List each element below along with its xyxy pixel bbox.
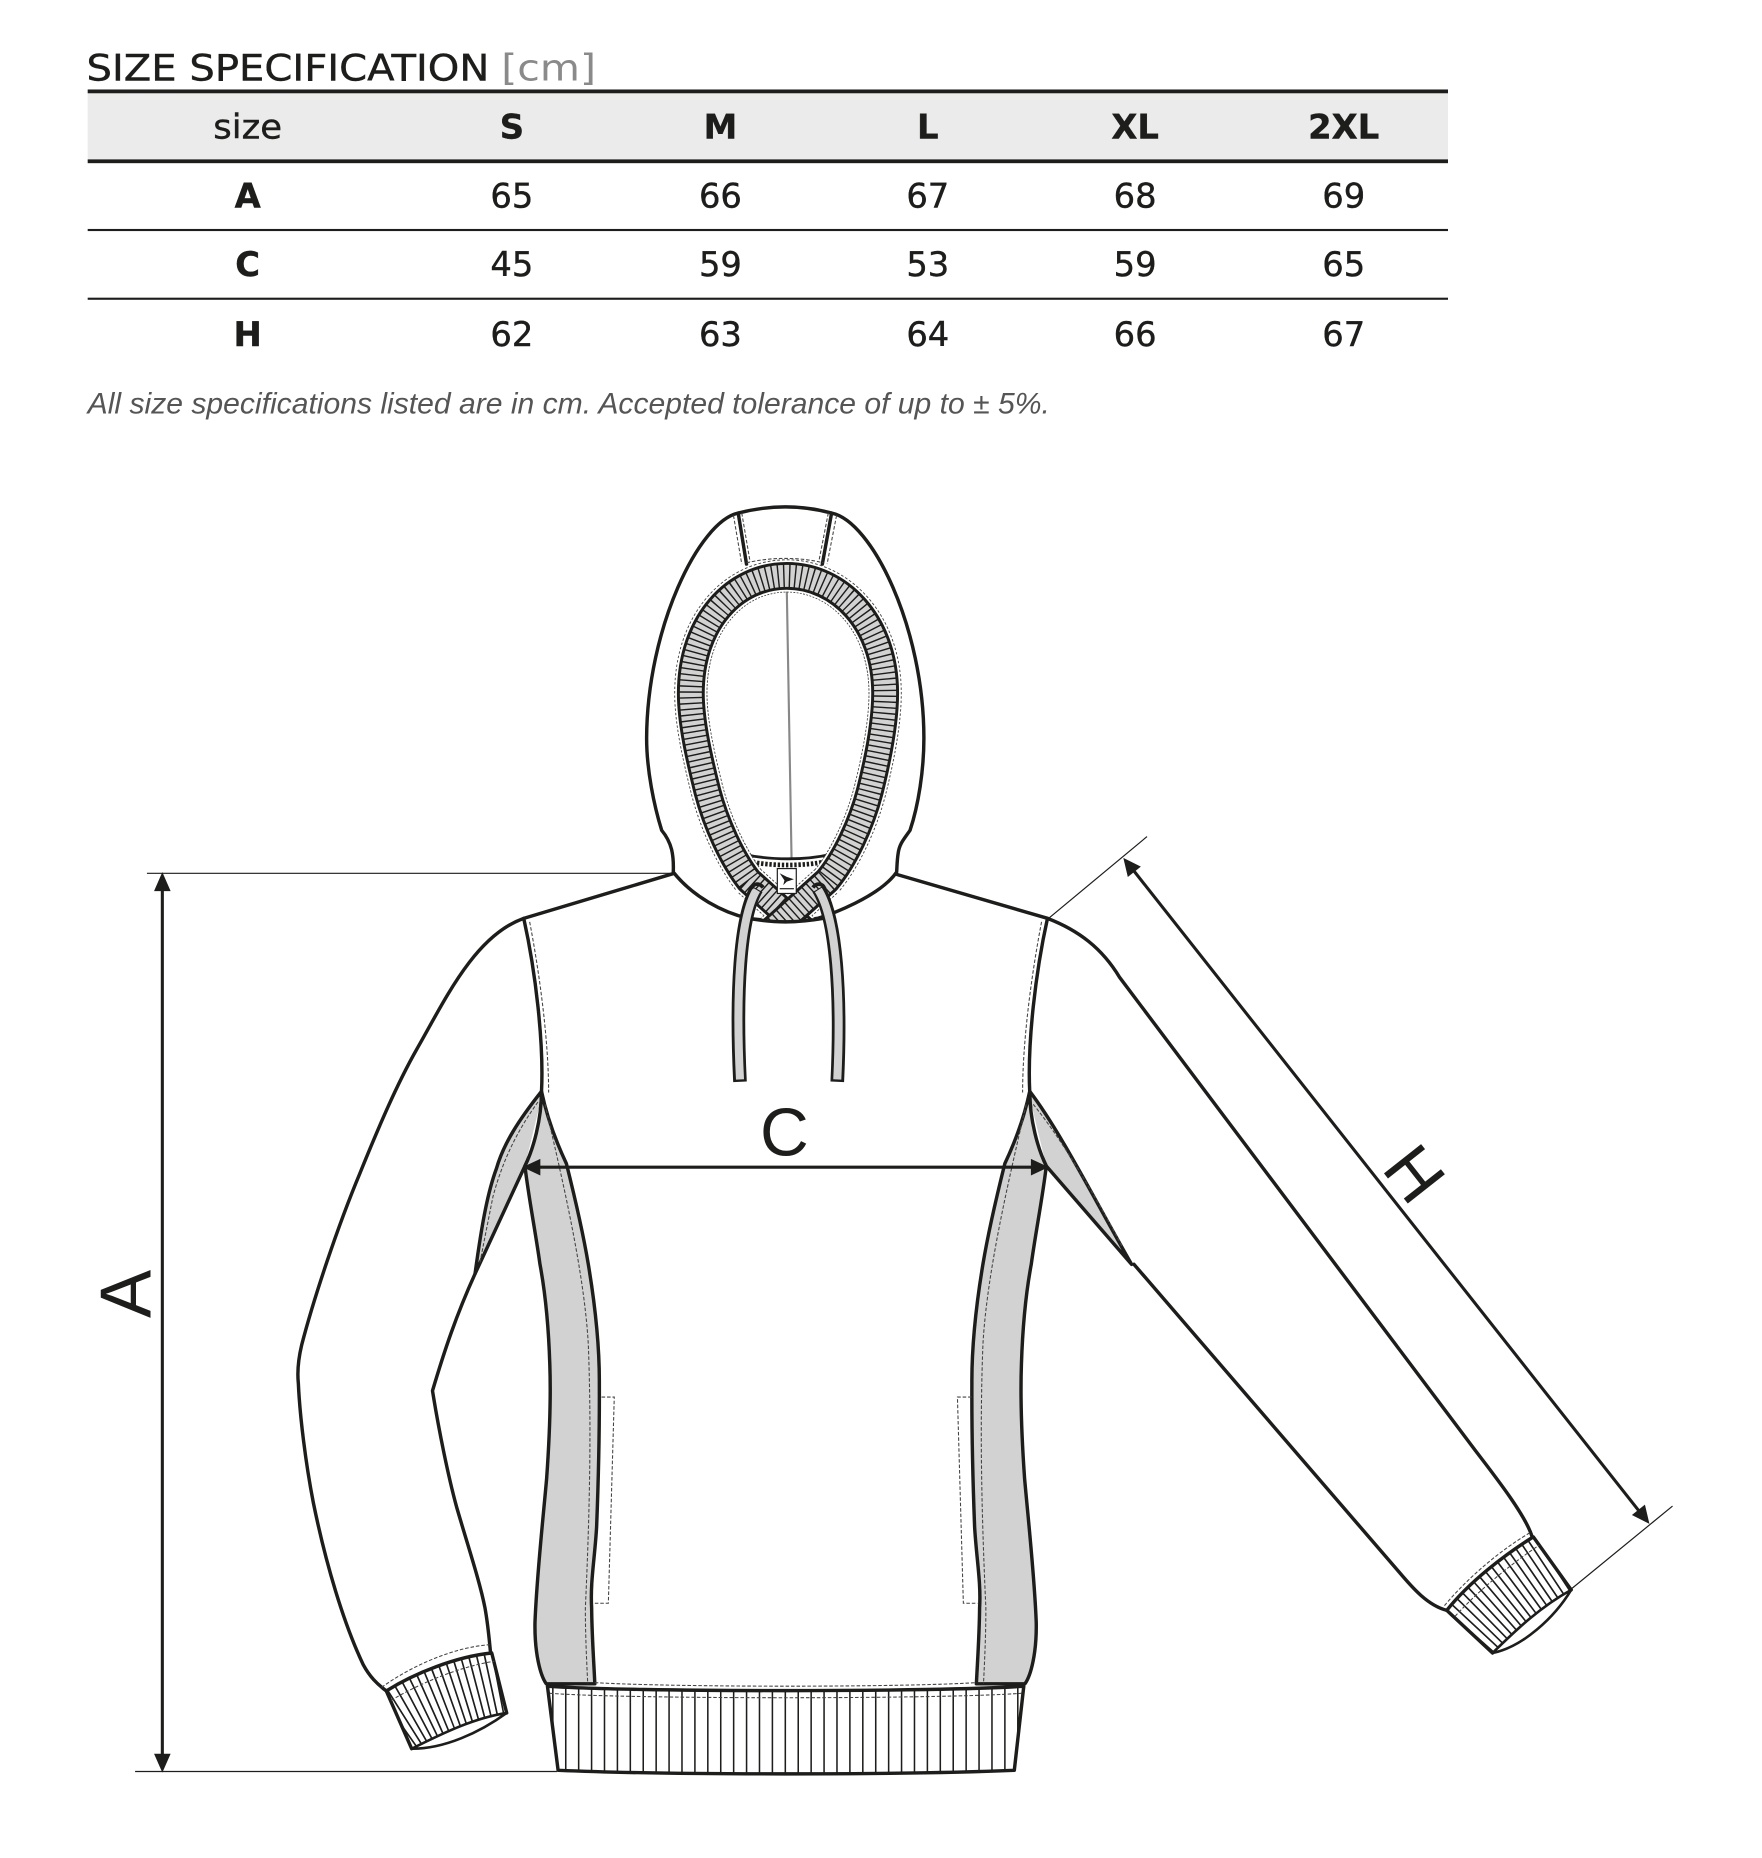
measurement C: C — [760, 1095, 809, 1170]
hoodie technical drawing — [298, 507, 1571, 1774]
measurement A: A — [86, 1269, 166, 1318]
gussets under the arms — [475, 1091, 1132, 1274]
row A — [235, 176, 1365, 215]
row A: 66 — [699, 176, 742, 215]
tolerance note: All size specifications listed are in cm. Accepted tolerance of up to ± 5%. — [86, 388, 1050, 421]
measurement A — [86, 872, 674, 1773]
left sleeve — [298, 918, 524, 1749]
hood top panel seams — [738, 513, 832, 564]
right cuff — [1444, 1532, 1571, 1653]
table header row: S — [500, 108, 524, 147]
shoulder and chest seams — [524, 873, 1047, 1091]
row C: 53 — [906, 245, 949, 284]
pocket openings — [595, 1397, 614, 1603]
row H: 66 — [1114, 315, 1157, 354]
row A: A — [235, 176, 261, 215]
right side panel — [972, 1091, 1046, 1684]
row H: 64 — [906, 315, 949, 354]
table header row: 2XL — [1308, 108, 1379, 147]
right sleeve — [1047, 918, 1571, 1653]
row A: 68 — [1114, 176, 1157, 215]
drawstrings — [738, 884, 839, 1082]
title: [cm] — [501, 47, 596, 90]
row H: 62 — [490, 315, 533, 354]
table header row: XL — [1111, 108, 1159, 147]
row C — [235, 245, 1365, 284]
band crossover overlay — [768, 880, 827, 934]
title: SIZE SPECIFICATION — [87, 47, 489, 90]
row H — [234, 315, 1365, 354]
left side panel — [525, 1091, 599, 1684]
left cuff — [382, 1645, 507, 1749]
table header row — [88, 89, 1448, 163]
measurement C — [523, 1095, 1049, 1175]
table header row: L — [917, 108, 939, 147]
stitching — [530, 922, 549, 1093]
hood — [647, 507, 924, 934]
row H: 67 — [1322, 315, 1365, 354]
hood drawcord rib band — [691, 576, 885, 934]
neck label — [777, 869, 796, 893]
measurement H — [1049, 837, 1673, 1589]
table header row: size — [213, 108, 282, 147]
row C: 59 — [1114, 245, 1157, 284]
row C: 59 — [699, 245, 742, 284]
row C: 45 — [490, 245, 533, 284]
inner collar and centre seam — [787, 590, 792, 858]
row C: C — [235, 245, 260, 284]
measurement H: H — [1369, 1131, 1460, 1217]
hoodie body — [524, 873, 1047, 1684]
row A: 65 — [490, 176, 533, 215]
hood bottom edge — [748, 918, 824, 922]
row H: 63 — [699, 315, 742, 354]
table header row: M — [704, 108, 737, 147]
row H: H — [234, 315, 262, 354]
row C: 65 — [1322, 245, 1365, 284]
hem rib — [539, 1683, 1033, 1774]
size table — [88, 89, 1448, 354]
row A: 69 — [1322, 176, 1365, 215]
row A: 67 — [906, 176, 949, 215]
